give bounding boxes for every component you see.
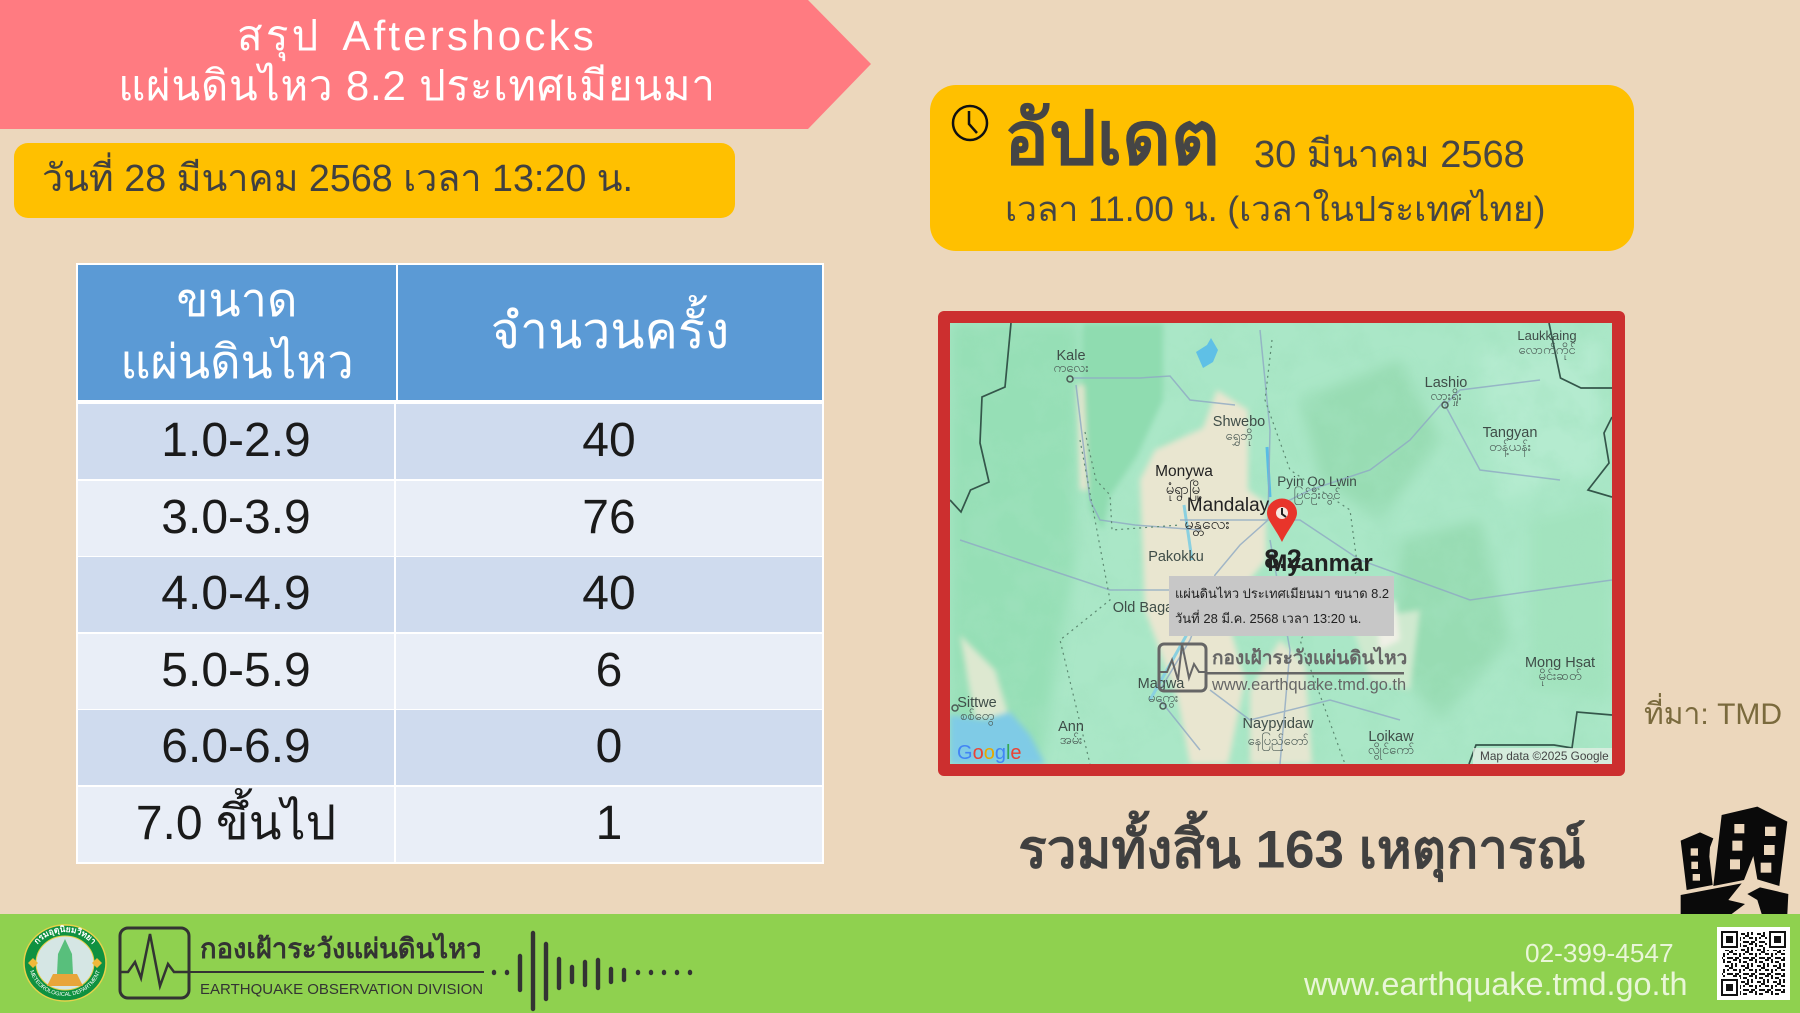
city labels: Lashio xyxy=(1425,375,1467,391)
city labels: Naypyidaw xyxy=(1243,716,1314,732)
icon: clock xyxy=(952,104,988,142)
website: www.earthquake.tmd.go.th xyxy=(1304,966,1688,1002)
city labels: Mong Hsat xyxy=(1525,655,1595,671)
row 2 count xyxy=(396,481,822,556)
city labels xyxy=(957,328,1595,745)
event tooltip: วันที่ 28 มี.ค. 2568 เวลา 13:20 น. xyxy=(1175,610,1361,626)
city labels: Ann xyxy=(1058,719,1084,735)
watermark logo: www.earthquake.tmd.go.th xyxy=(1211,676,1406,694)
burmese city labels: ရွှေဘို xyxy=(1225,428,1253,446)
row 6 count xyxy=(396,787,822,862)
burmese city labels: အမ်း xyxy=(1060,732,1082,747)
meteorological department seal: METEOROLOGICAL DEPARTMENT xyxy=(30,970,100,996)
title banner xyxy=(0,0,871,129)
location markers xyxy=(952,376,1448,711)
row 3 count: 40 xyxy=(582,566,636,620)
burmese city labels: လွိုင်ကော် xyxy=(1368,742,1414,760)
row 4 count: 6 xyxy=(596,644,622,696)
row 3 count xyxy=(396,557,822,632)
burmese city labels: စစ်တွေ xyxy=(960,708,994,726)
meteorological department seal xyxy=(23,924,107,1002)
burmese city labels: နေပြည်တော် xyxy=(1247,732,1309,751)
map panel xyxy=(938,311,1625,776)
earthquake pin xyxy=(1267,498,1297,542)
city labels: Magwa xyxy=(1138,676,1185,692)
burmese city labels: ကလေး xyxy=(1053,360,1089,375)
row 6 magnitude xyxy=(78,787,394,862)
burmese city labels: မန္တလေး xyxy=(1184,516,1230,536)
table header: magnitude xyxy=(78,265,396,400)
table header: count xyxy=(398,265,822,400)
row 4 count xyxy=(396,634,822,709)
google logo: Google xyxy=(957,742,1022,764)
row 1 magnitude: 1.0-2.9 xyxy=(161,414,311,466)
row 3 magnitude xyxy=(78,557,394,632)
source note: ที่มา: TMD xyxy=(1644,698,1782,731)
city labels: Sittwe xyxy=(957,695,997,711)
dark city labels: Myanmar xyxy=(1267,550,1373,577)
city labels: Kale xyxy=(1056,348,1086,364)
dark city labels xyxy=(1187,495,1373,577)
city labels: Shwebo xyxy=(1213,414,1265,430)
row 5 count xyxy=(396,710,822,785)
city labels: Pakokku xyxy=(1148,549,1204,565)
row 2 magnitude xyxy=(78,481,394,556)
city labels: Monywa xyxy=(1155,463,1213,480)
sound-wave decoration xyxy=(492,930,692,1012)
city labels: Pyin Oo Lwin xyxy=(1277,474,1357,489)
event date text: วันที่ 28 มีนาคม 2568 เวลา 13:20 น. xyxy=(42,157,633,199)
watermark logo: กองเฝ้าระวังแผ่นดินไหว xyxy=(1212,646,1407,669)
total events: รวมทั้งสิ้น 163 เหตุการณ์ xyxy=(1018,820,1586,880)
map attribution: Map data ©2025 Google xyxy=(1480,749,1609,763)
table header: count: จำนวนครั้ง xyxy=(491,302,729,358)
divider line xyxy=(190,971,484,973)
row 6 magnitude: 7.0 ขึ้นไป xyxy=(136,797,336,850)
aftershock table xyxy=(76,263,824,864)
update time: เวลา 11.00 น. (เวลาในประเทศไทย) xyxy=(1005,190,1545,229)
row 2 magnitude: 3.0-3.9 xyxy=(161,490,311,544)
division name english: EARTHQUAKE OBSERVATION DIVISION xyxy=(200,981,483,998)
row 1 count xyxy=(396,404,822,479)
row 4 magnitude xyxy=(78,634,394,709)
row 2 count: 76 xyxy=(582,490,636,544)
row 1 magnitude xyxy=(78,404,394,479)
burmese city labels: လားရှိုး xyxy=(1430,388,1462,406)
event date bar xyxy=(14,143,735,218)
row 5 magnitude xyxy=(78,710,394,785)
event tooltip: แผ่นดินไหว ประเทศเมียนมา ขนาด 8.2 xyxy=(1175,586,1389,601)
burmese city labels xyxy=(960,342,1582,760)
event tooltip xyxy=(1169,576,1394,636)
burmese city labels: မကွေး xyxy=(1148,690,1178,708)
burmese city labels: လောက်ကိုင် xyxy=(1518,342,1576,360)
title text: แผ่นดินไหว 8.2 ประเทศเมียนมา xyxy=(118,62,716,109)
map xyxy=(950,323,1612,764)
table header: magnitude: แผ่นดินไหว xyxy=(120,335,354,388)
watermark logo xyxy=(1159,644,1407,694)
dark city labels: Mandalay xyxy=(1187,495,1270,516)
row 5 magnitude: 6.0-6.9 xyxy=(161,720,311,772)
update panel xyxy=(930,85,1634,251)
QR code xyxy=(1717,927,1790,1000)
burmese city labels: မုံရွာမြို့ xyxy=(1166,479,1203,501)
dark city labels: 8.2 xyxy=(1264,544,1302,574)
phone number: 02-399-4547 xyxy=(1525,938,1674,968)
city labels: Tangyan xyxy=(1483,425,1537,441)
footer bar xyxy=(0,914,1800,1013)
row 5 count: 0 xyxy=(596,720,622,772)
table header: magnitude: ขนาด xyxy=(176,273,298,326)
update heading: อัปเดต xyxy=(1004,96,1220,180)
row 3 magnitude: 4.0-4.9 xyxy=(161,566,311,620)
burmese city labels: ပြင်ဦးလွင် xyxy=(1294,486,1341,505)
burmese city labels: မိုင်းဆတ် xyxy=(1538,668,1582,686)
icon: collapsing buildings xyxy=(1680,806,1788,914)
burmese city labels: တန့်ယန်း xyxy=(1489,439,1531,457)
title text: สรุป Aftershocks xyxy=(237,12,597,59)
meteorological department seal: กรมอุตุนิยมวิทยา xyxy=(34,925,95,944)
city labels: Loikaw xyxy=(1368,729,1414,745)
row 1 count: 40 xyxy=(582,414,636,466)
update date: 30 มีนาคม 2568 xyxy=(1254,134,1525,176)
icon: seismograph box xyxy=(118,926,190,1000)
division name thai: กองเฝ้าระวังแผ่นดินไหว xyxy=(200,933,482,964)
row 6 count: 1 xyxy=(596,796,622,850)
row 4 magnitude: 5.0-5.9 xyxy=(161,644,311,696)
title text xyxy=(118,12,716,109)
city labels: Laukkaing xyxy=(1517,328,1577,343)
city labels: Old Bagan xyxy=(1113,600,1181,616)
